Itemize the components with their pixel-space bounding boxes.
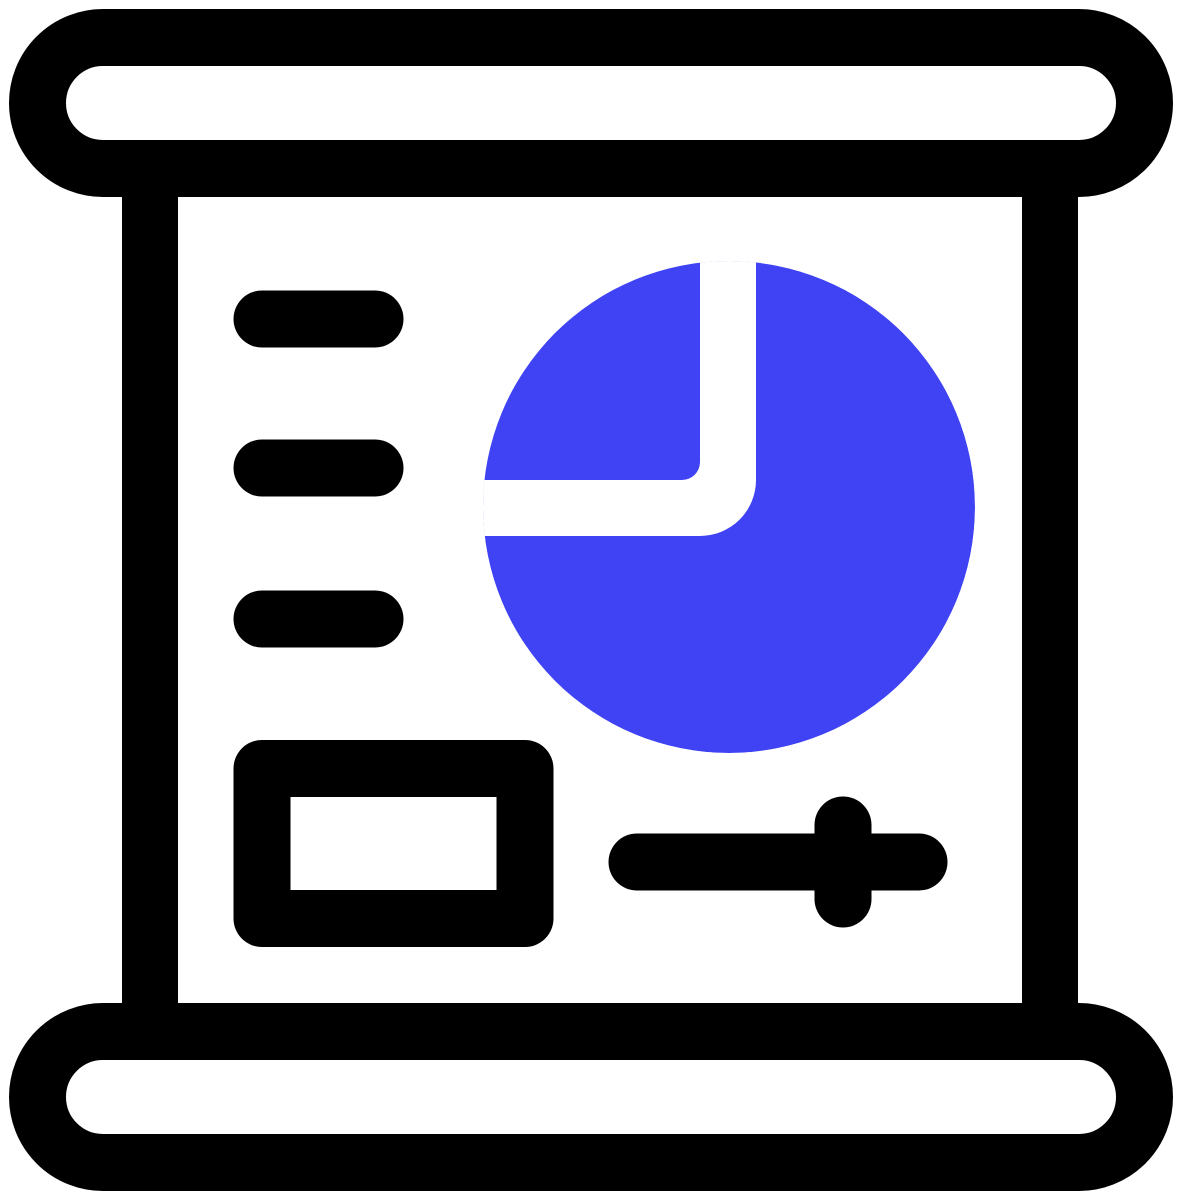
slider bbox=[637, 825, 919, 899]
bottom roll bbox=[38, 1032, 1144, 1162]
top roll bbox=[38, 38, 1144, 168]
text lines bbox=[262, 319, 375, 619]
outlined rectangle box bbox=[262, 768, 525, 918]
pie chart bbox=[483, 261, 975, 753]
side bars of scroll bbox=[122, 190, 1078, 1010]
